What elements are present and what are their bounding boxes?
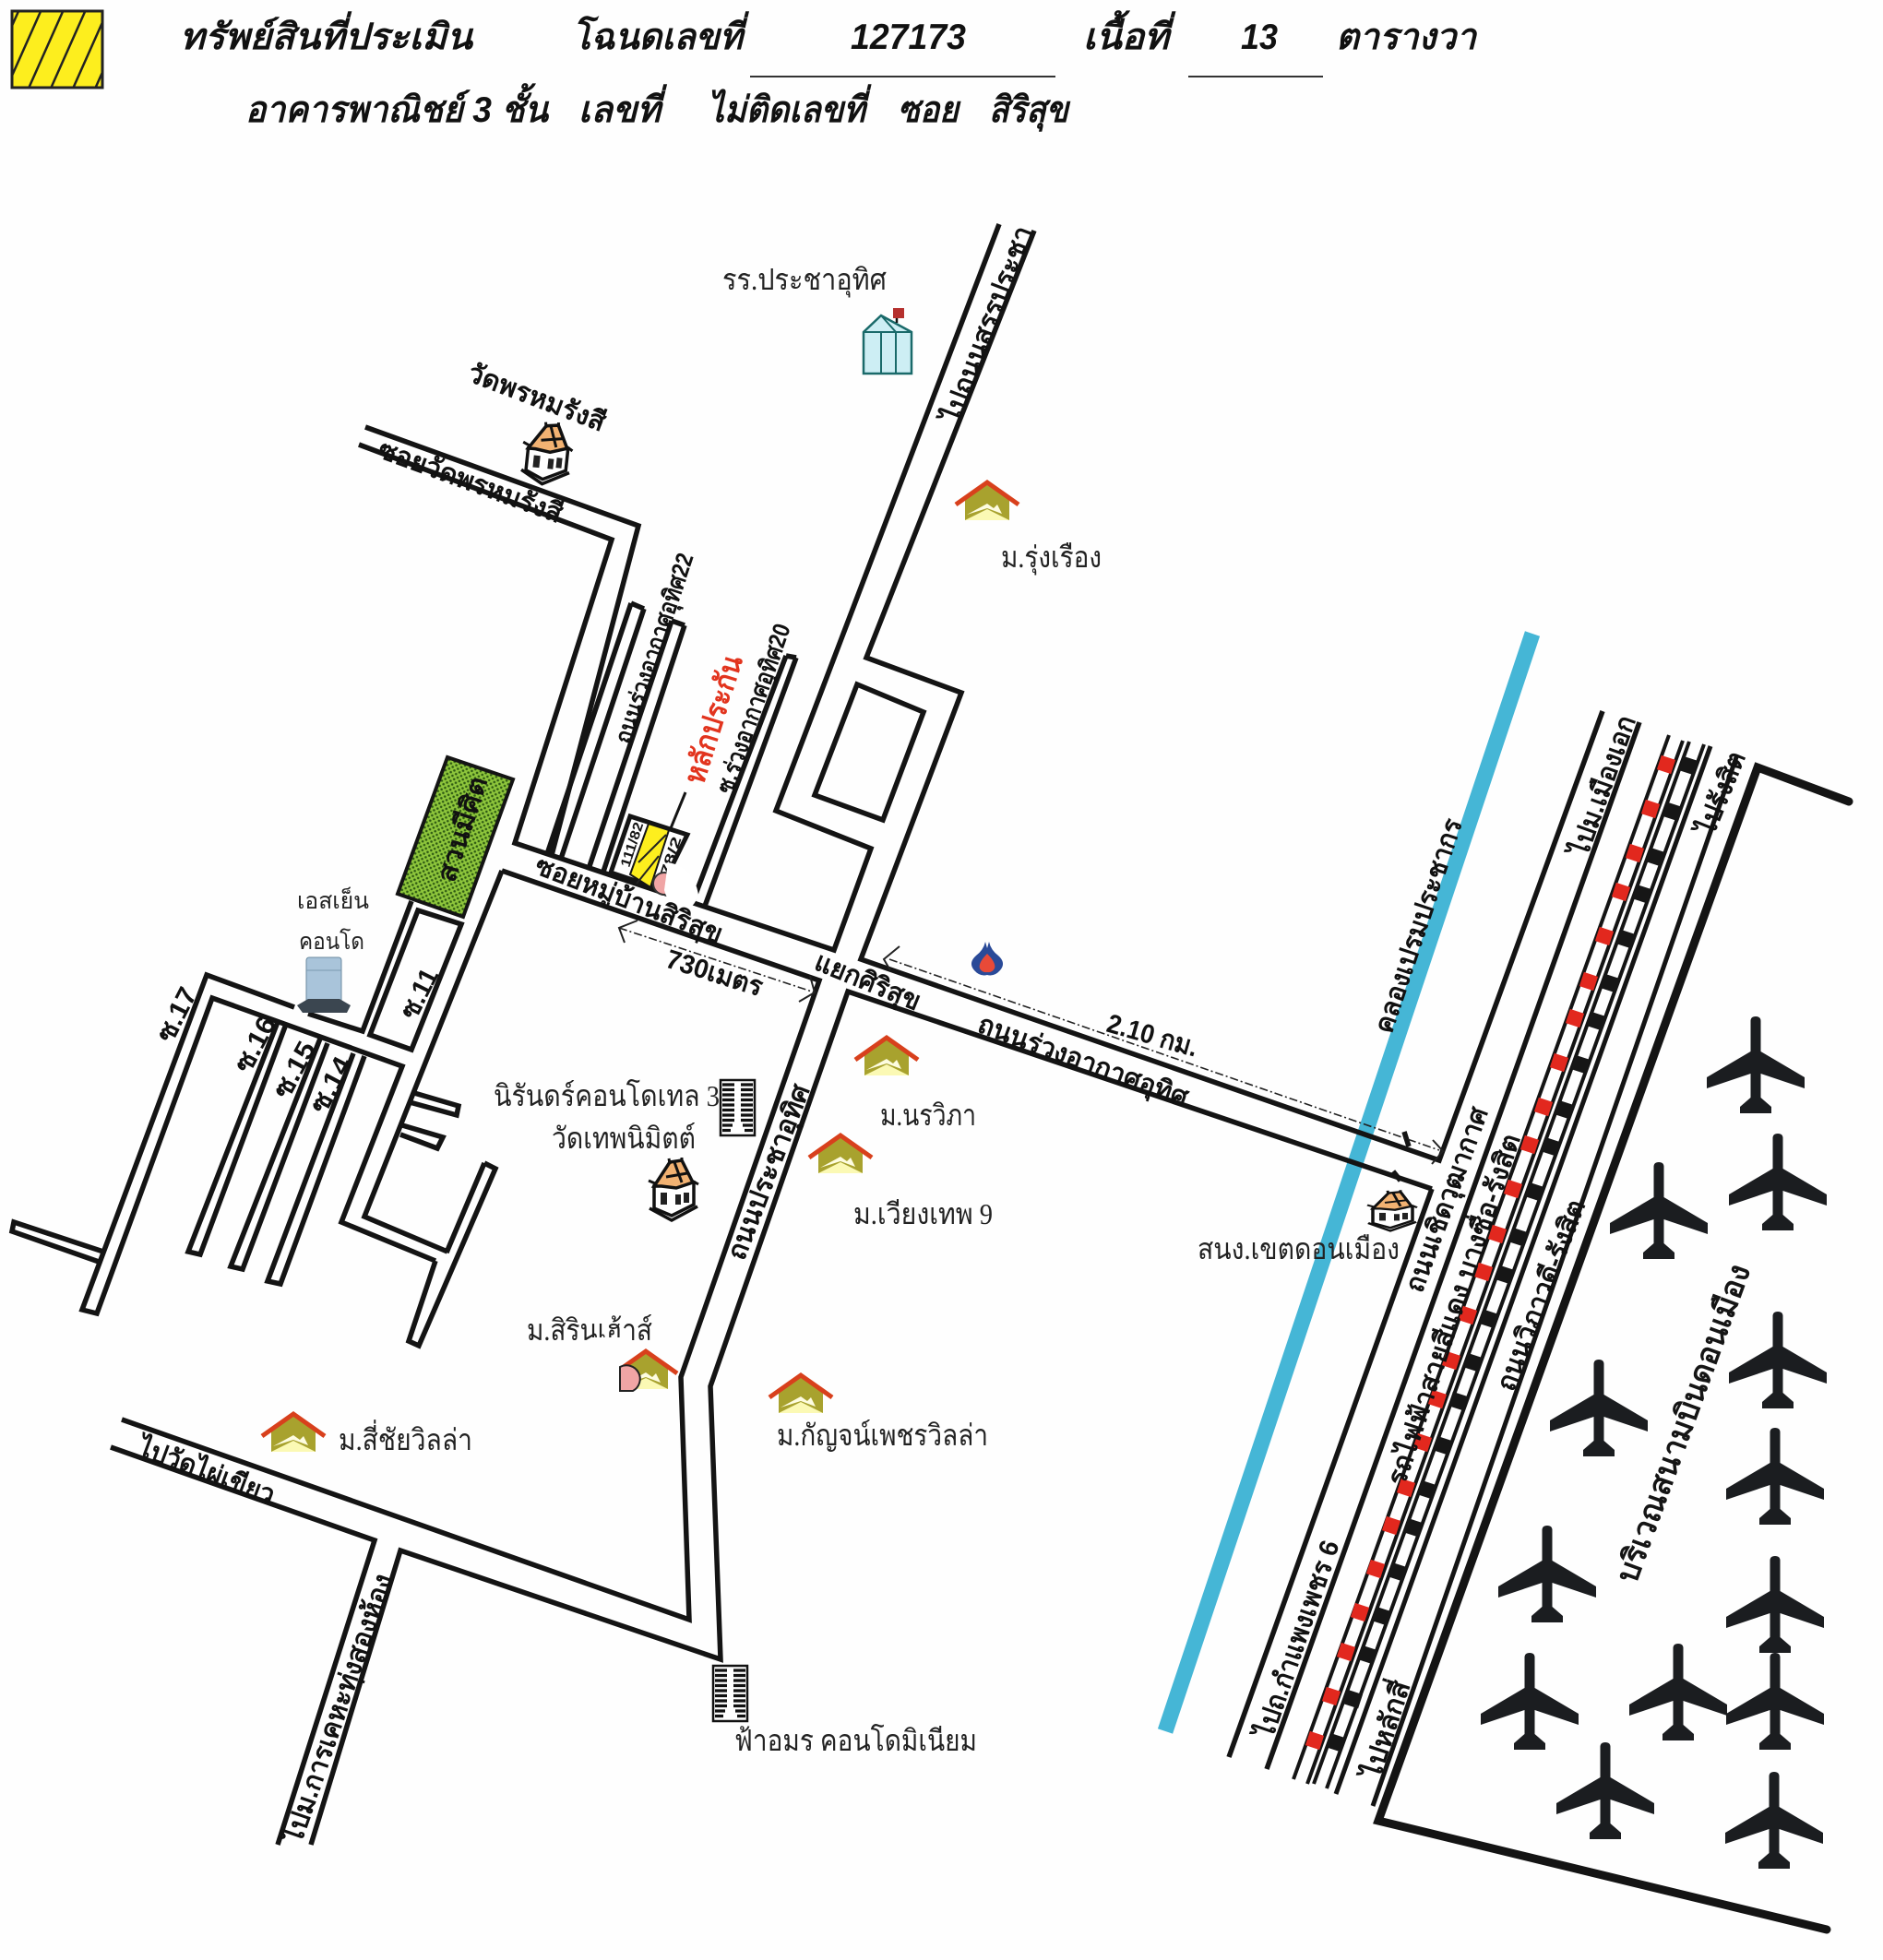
road names: สวนมีศิต: [432, 773, 494, 885]
road names: ถนนประชาอุทิศ: [722, 1080, 817, 1265]
place labels: คอนโด: [299, 928, 364, 955]
icon: school: [864, 308, 912, 374]
road names: ไปม.การเคหะทุ่งสองห้อง: [276, 1570, 399, 1849]
wat phrom rangsi label: วัดพรหมรังสี: [464, 359, 610, 438]
header text line 2: ซอย: [898, 90, 961, 130]
place labels: ม.เวียงเทพ 9: [853, 1197, 993, 1230]
header text line 1: โฉนดเลขที่: [572, 11, 750, 57]
icon: district office: [1367, 1190, 1417, 1230]
icon: Fa Amon condominium building: [713, 1666, 747, 1721]
header text line 2: อาคารพาณิชย์ 3 ชั้น: [245, 83, 549, 130]
road names: ถนนร่วงอากาศอุทิศ22: [609, 550, 700, 748]
place labels: ม.รุ่งเรือง: [1001, 540, 1102, 576]
dashed distance arrow 2.10 km: [884, 946, 1443, 1164]
subject property plots: 111/82: [618, 820, 647, 869]
road names: ซ.15: [268, 1037, 322, 1103]
airplanes in airport area: [1481, 1016, 1827, 1869]
road names: ไปถนนสรรประชา: [935, 221, 1039, 429]
icons: housing estates: [262, 482, 1019, 1452]
road names: ถนนวิภาวดี-รังสิต: [1492, 1196, 1591, 1396]
road names: ถนนร่วงอากาศอุทิศ: [973, 1010, 1193, 1114]
header text line 1: ตารางวา: [1336, 18, 1478, 57]
place labels: ฟ้าอมร คอนโดมิเนียม: [734, 1724, 977, 1757]
place labels: รร.ประชาอุทิศ: [722, 263, 887, 298]
header text line 1: ทรัพย์สินที่ประเมิน: [180, 11, 473, 57]
collateral label in red: หลักประกัน: [677, 651, 749, 788]
dashed distance arrow 730 m: [619, 921, 815, 1002]
header text line 1: [180, 10, 1478, 77]
road names: ถนนเชิดวุฒากาศ: [1400, 1103, 1496, 1297]
road names: ซ.16: [229, 1012, 282, 1077]
place labels: สนง.เขตดอนเมือง: [1198, 1232, 1400, 1265]
road names: ไปม.เมืองเอก: [1563, 711, 1642, 862]
header text line 1: 127173: [851, 18, 966, 57]
road names: ซ.ร่วงอากาศอุทิศ20: [710, 620, 798, 798]
place labels: ม.กัญจน์เพชรวิลล่า: [777, 1419, 988, 1452]
place labels: ม.สี่ชัยวิลล่า: [339, 1420, 472, 1456]
road names: ซ.17: [151, 982, 203, 1047]
header text line 2: เลขที่: [578, 84, 668, 130]
header text line 2: [245, 83, 1071, 132]
place labels: เอสเย็น: [297, 886, 369, 914]
road names: ซอยวัดพรหมรังสี: [375, 435, 566, 529]
road names: 2.10 กม.: [1103, 1009, 1201, 1063]
road names: ไปหลักสี่: [1352, 1675, 1416, 1785]
header text line 1: 13: [1241, 18, 1278, 57]
road names: คลองเปรมประชากร: [1369, 814, 1469, 1037]
road network: [12, 224, 1639, 1845]
header text line 1: เนื้อที่: [1083, 10, 1176, 57]
road names: ไปวัดไผ่เขียว: [132, 1431, 280, 1511]
road names: ไปถ.กำแพงเพชร 6: [1248, 1536, 1346, 1744]
road names: 730เมตร: [662, 944, 767, 1003]
icon: PTT petrol station: [971, 942, 1003, 975]
road names: แยกศิริสุข: [810, 947, 924, 1017]
road names: ซอยหมู่บ้านสิริสุข: [530, 851, 727, 951]
airport area label: บริเวณสนามบินดอนเมือง: [1610, 1260, 1758, 1587]
icon: condo S-Yen: [297, 957, 351, 1013]
place labels: ม.สิรินเฮ้าส์: [527, 1313, 652, 1347]
place labels: ม.นรวิภา: [880, 1099, 976, 1132]
road names: ซ.11: [395, 964, 445, 1024]
place labels: วัดเทพนิมิตต์: [552, 1122, 696, 1155]
airport boundary: [1378, 767, 1849, 1930]
road names: รถไฟฟ้าสายสีแดง บางซื่อ-รังสิต: [1377, 1129, 1527, 1489]
icon: Niran condotel building: [721, 1080, 755, 1135]
place labels: นิรันดร์คอนโดเทล 3: [494, 1079, 720, 1112]
subject property plots: [611, 792, 698, 909]
road names: [132, 221, 1752, 1849]
header text line 2: ไม่ติดเลขที่: [708, 84, 872, 130]
railway: red line tracks: [1293, 735, 1737, 1806]
road names: ไปรังสิต: [1689, 747, 1752, 841]
icon: temple Phrom Rangsi: [519, 419, 576, 487]
road names: ซ.14: [304, 1052, 358, 1118]
canal: Khlong Prem Prachakon: [1165, 634, 1532, 1731]
green park block: [398, 757, 513, 917]
subject property plots: 78/2: [658, 835, 685, 878]
place labels: [297, 263, 1400, 1757]
icon: temple Thep Nimit: [649, 1158, 698, 1220]
legend swatch: appraised property: [12, 11, 102, 88]
header text line 2: สิริสุข: [989, 90, 1071, 132]
